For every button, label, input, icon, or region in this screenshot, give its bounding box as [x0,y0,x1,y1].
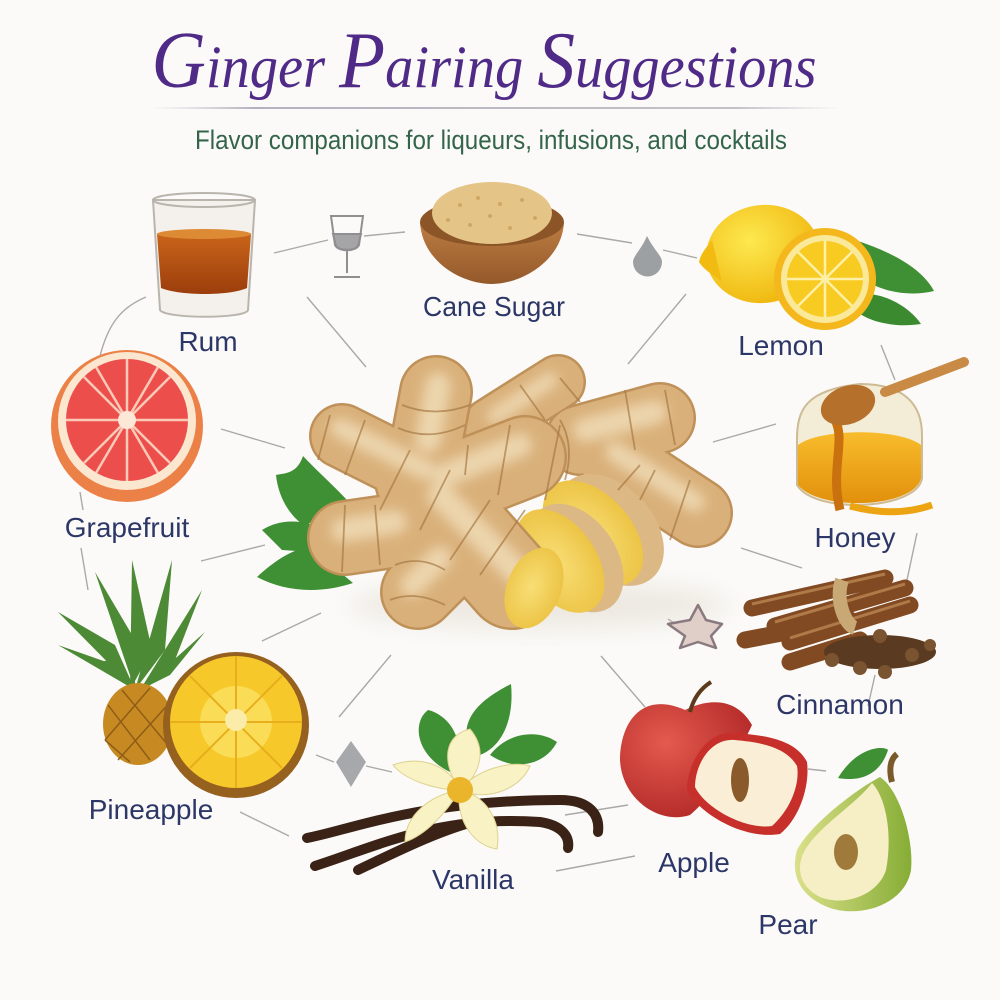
icon: star [668,605,722,648]
title: Ginger Pairing Suggestions [152,17,817,105]
icon: wine glass [331,216,363,277]
icon: drop [633,236,662,276]
grapefruit [51,350,203,502]
connector lines [80,232,917,871]
label: Pineapple: Pineapple [89,794,213,825]
label: Pear: Pear [758,909,818,940]
sugar bowl [420,182,564,284]
apple [620,682,808,835]
label: Rum: Rum [178,326,238,357]
subtitle: Flavor companions for liqueurs, infusions, and cocktails [195,125,787,155]
ginger ridges [318,378,690,605]
cinnamon [745,574,936,679]
lemon [699,198,934,330]
label: Honey: Honey [815,522,895,553]
honey jar [797,362,964,512]
label: Vanilla: Vanilla [432,864,514,895]
pineapple [58,560,309,798]
label: Grapefruit: Grapefruit [65,512,189,543]
rum glass [153,193,255,317]
label: Lemon: Lemon [738,330,824,361]
ginger shadow [350,581,730,629]
ginger back lobes [490,380,698,513]
pear [795,748,911,911]
ginger root [257,378,730,637]
ginger slices [497,453,686,630]
label: Cinnamon: Cinnamon [776,689,904,720]
icon: flame drop [336,741,366,787]
ginger leaves [257,456,353,590]
label: Cane Sugar: Cane Sugar [423,291,565,322]
ginger front lobes [340,385,525,592]
vanilla [307,684,598,870]
ginger cut face [493,539,575,637]
label: Apple: Apple [658,847,730,878]
